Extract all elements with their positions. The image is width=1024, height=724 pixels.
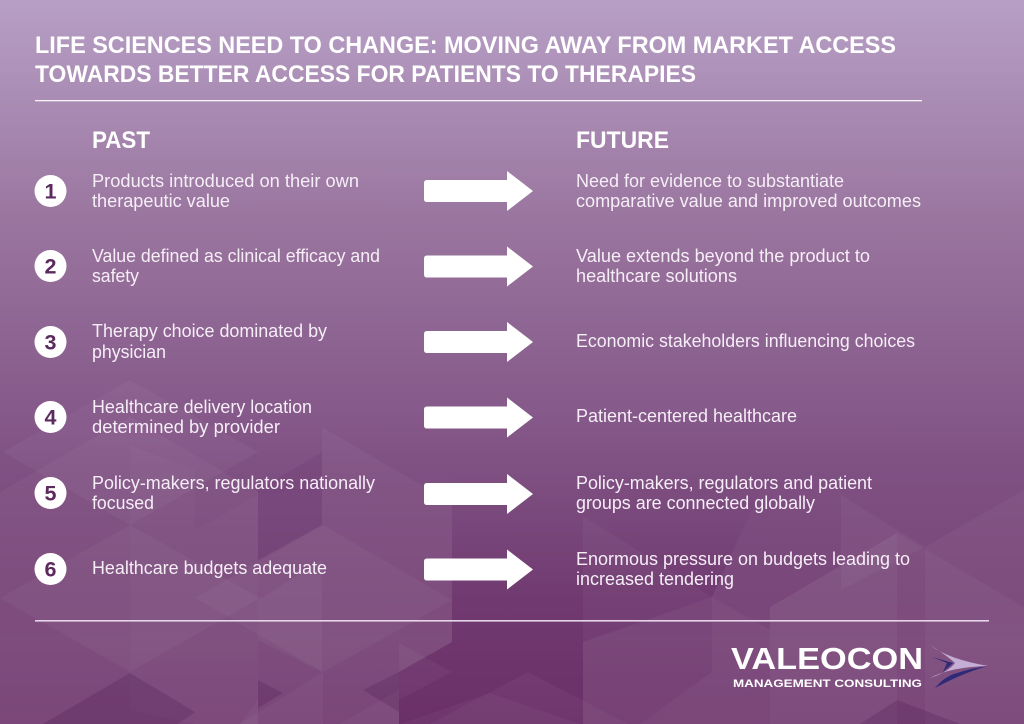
future text 6 bbox=[576, 549, 910, 589]
number badge 5 bbox=[34, 477, 66, 509]
arrow 2 bbox=[424, 246, 533, 286]
future text 6: Enormous pressure on budgets leading to bbox=[576, 549, 910, 569]
title: TOWARDS BETTER ACCESS FOR PATIENTS TO THERAPIES bbox=[35, 61, 696, 88]
future text 1: Need for evidence to substantiate bbox=[576, 171, 844, 191]
future text 2 bbox=[576, 246, 870, 286]
row 4 bbox=[34, 397, 797, 438]
future text 5 bbox=[576, 473, 872, 513]
row 2 bbox=[34, 246, 870, 286]
logo: Valeocon Management Consulting bbox=[731, 642, 988, 690]
future text 2: Value extends beyond the product to bbox=[576, 246, 870, 266]
past text 6: Healthcare budgets adequate bbox=[92, 558, 327, 578]
future text 4: Patient-centered healthcare bbox=[576, 406, 797, 426]
row 5 bbox=[34, 473, 872, 514]
future text 1: comparative value and improved outcomes bbox=[576, 191, 921, 211]
past text 1 bbox=[92, 171, 359, 211]
past text 3 bbox=[92, 321, 327, 362]
past text 2: Value defined as clinical efficacy and bbox=[92, 246, 380, 266]
future text 3: Economic stakeholders influencing choices bbox=[576, 331, 915, 351]
past text 2 bbox=[92, 246, 380, 286]
past text 5: focused bbox=[92, 493, 154, 513]
arrow 4 bbox=[424, 398, 533, 438]
future text 6: increased tendering bbox=[576, 569, 734, 589]
number badge 1: 1 bbox=[45, 180, 57, 204]
past text 4: determined by provider bbox=[92, 417, 280, 437]
arrow 6 bbox=[424, 550, 533, 590]
title bbox=[35, 32, 896, 88]
row 6 bbox=[34, 549, 910, 590]
number badge 2: 2 bbox=[45, 254, 57, 278]
heading: future: FUTURE bbox=[576, 127, 669, 154]
number badge 4 bbox=[34, 401, 66, 433]
future text 1 bbox=[576, 171, 921, 211]
logo arrow mark bbox=[930, 645, 988, 688]
logo: Valeocon Management Consulting: MANAGEMENT CONSULTING bbox=[733, 678, 922, 690]
future text 5: Policy-makers, regulators and patient bbox=[576, 473, 872, 493]
heading: past: PAST bbox=[92, 127, 150, 154]
number badge 2 bbox=[34, 250, 66, 282]
past text 3: physician bbox=[92, 342, 166, 362]
past text 5 bbox=[92, 473, 375, 513]
future text 5: groups are connected globally bbox=[576, 493, 815, 513]
past text 4 bbox=[92, 397, 312, 437]
future text 2: healthcare solutions bbox=[576, 266, 737, 286]
arrow 1 bbox=[424, 171, 533, 211]
logo: Valeocon Management Consulting: VALEOCON bbox=[731, 642, 923, 676]
row 3 bbox=[34, 321, 915, 362]
row 1 bbox=[34, 171, 921, 211]
number badge 3 bbox=[34, 326, 66, 358]
past text 5: Policy-makers, regulators nationally bbox=[92, 473, 375, 493]
past text 4: Healthcare delivery location bbox=[92, 397, 312, 417]
number badge 1 bbox=[34, 175, 66, 207]
background triangle pattern bbox=[0, 380, 1024, 724]
past text 1: therapeutic value bbox=[92, 191, 230, 211]
past text 1: Products introduced on their own bbox=[92, 171, 359, 191]
number badge 3: 3 bbox=[45, 330, 57, 354]
past text 3: Therapy choice dominated by bbox=[92, 321, 327, 341]
number badge 5: 5 bbox=[45, 482, 57, 506]
arrow 5 bbox=[424, 474, 533, 514]
number badge 6 bbox=[34, 553, 66, 585]
title: LIFE SCIENCES NEED TO CHANGE: MOVING AWAY FROM MARKET ACCESS bbox=[35, 32, 896, 59]
number badge 6: 6 bbox=[45, 558, 57, 582]
arrow 3 bbox=[424, 322, 533, 362]
past text 2: safety bbox=[92, 266, 139, 286]
number badge 4: 4 bbox=[45, 406, 57, 430]
